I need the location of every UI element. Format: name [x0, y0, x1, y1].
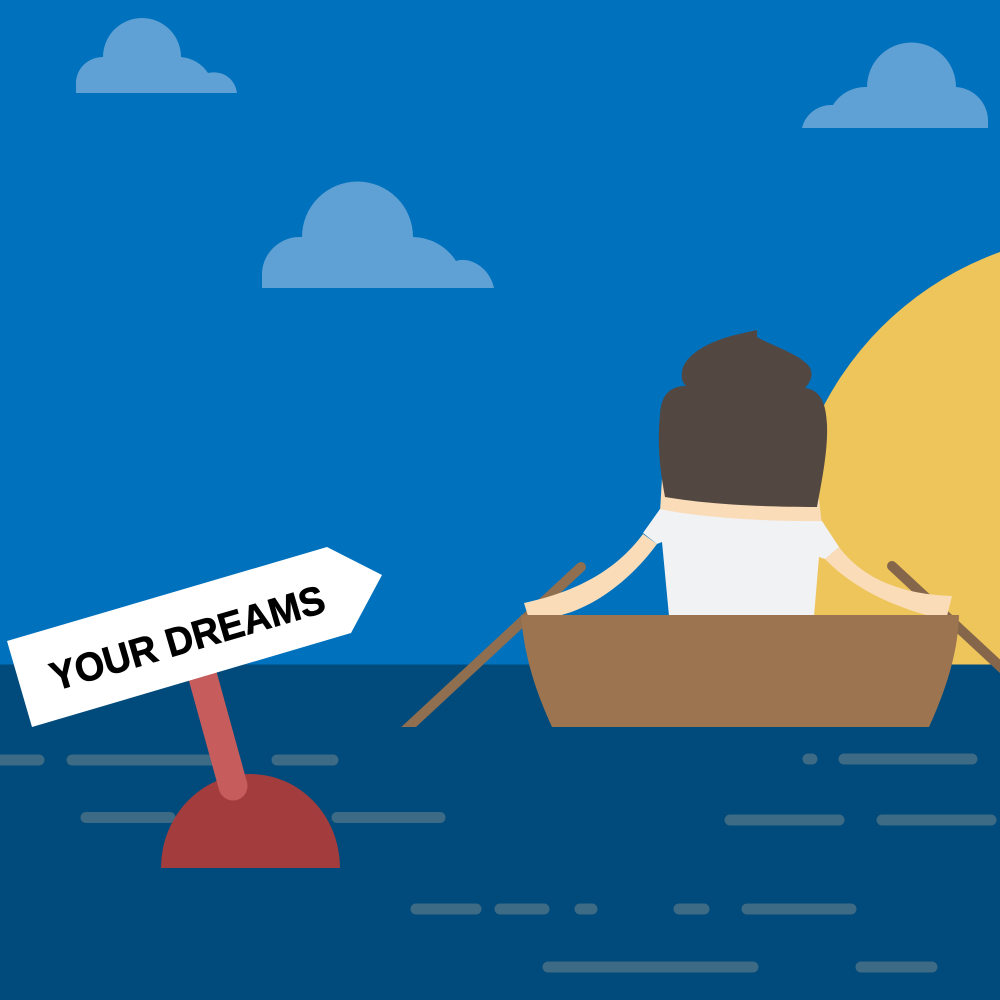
cloud: top left [76, 18, 237, 93]
buoy [161, 774, 340, 868]
sun [787, 233, 1000, 877]
sea [0, 664, 1000, 1000]
sign: your dreams [7, 547, 382, 727]
cloud: top right [802, 42, 988, 128]
cloud: centre [262, 182, 494, 288]
arm: right [825, 547, 952, 616]
water ripples [0, 759, 991, 967]
oar: right [892, 566, 1000, 670]
sign: your dreams: YOUR DREAMS [45, 578, 330, 700]
boat [521, 615, 959, 727]
shirt [643, 509, 839, 616]
neck [660, 478, 822, 530]
buoy post [201, 670, 233, 786]
oar: left [400, 567, 581, 735]
hair [659, 330, 827, 507]
sky [0, 0, 1000, 665]
arm: left [524, 534, 657, 616]
rower [524, 330, 952, 616]
